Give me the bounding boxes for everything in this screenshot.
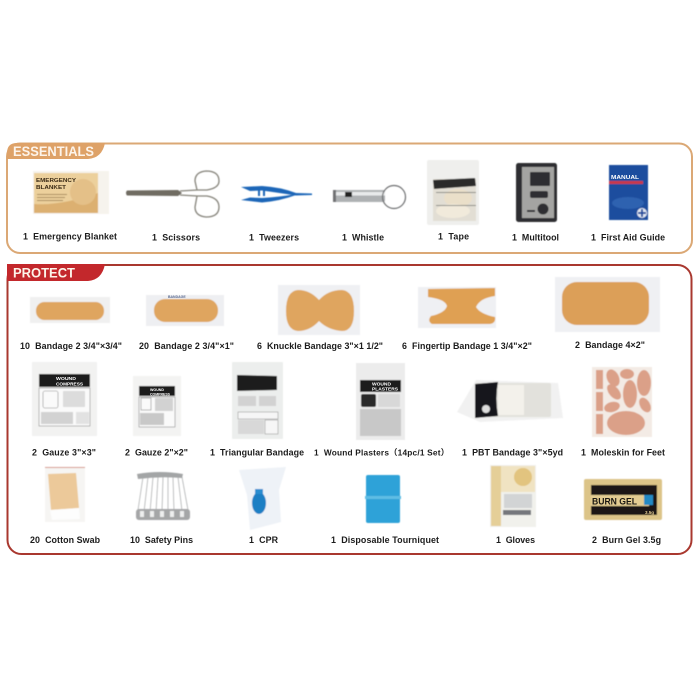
item: gauze 2x2: 2 Gauze 2"×2" [125, 448, 188, 458]
item: emergency blanket: EMERGENCY [36, 178, 76, 184]
item: wound plasters: 1 Wound Plasters（14pc/1 Set） [314, 448, 449, 458]
item: tape: 1 Tape [438, 232, 469, 242]
heading: protect: PROTECT [13, 266, 76, 280]
heading: essentials: ESSENTIALS [13, 144, 94, 159]
item: cpr [239, 467, 286, 545]
item: multitool: 1 Multitool [512, 232, 559, 242]
item: knuckle bandage [257, 285, 383, 351]
item: wound plasters [314, 363, 449, 458]
item: gloves [490, 465, 536, 545]
item: gloves: 1 Gloves [496, 535, 535, 545]
item: cotton swab [30, 467, 101, 545]
item: first aid guide: MANUAL [611, 175, 640, 181]
item: emergency blanket: 1 Emergency Blanket [23, 232, 117, 242]
item: cpr: 1 CPR [249, 535, 279, 545]
item: emergency blanket [23, 171, 117, 242]
item: gauze 2x2: WOUND [150, 388, 164, 392]
item: bandage 20 [139, 295, 234, 351]
item: gauze 2x2 [125, 376, 188, 458]
item: burn gel: 3.5g [645, 510, 654, 515]
item: disposable tourniquet [331, 475, 439, 545]
item: pbt bandage: 1 PBT Bandage 3"×5yd [462, 448, 563, 458]
item: bandage 4x2: 2 Bandage 4×2" [575, 340, 645, 350]
item: gauze 3x3: 2 Gauze 3"×3" [32, 448, 96, 458]
item: tweezers [241, 186, 312, 242]
item: moleskin: 1 Moleskin for Feet [581, 448, 665, 458]
item: pbt bandage [457, 380, 563, 458]
item: tape [427, 160, 479, 242]
item: first aid guide [591, 165, 665, 242]
item: tweezers: 1 Tweezers [249, 232, 299, 242]
item: burn gel: BURN GEL [592, 496, 637, 506]
item: emergency blanket: BLANKET [36, 185, 67, 191]
item: triangular bandage: 1 Triangular Bandage [210, 448, 304, 458]
item: cotton swab: 20 Cotton Swab [30, 535, 101, 545]
item: bandage 20: BANDAGE [168, 295, 186, 299]
item: gauze 3x3 [32, 362, 97, 458]
item: gauze 3x3: COMPRESS [56, 382, 83, 386]
panel: essentials [7, 143, 692, 253]
item: fingertip bandage [402, 287, 532, 351]
item: burn gel [584, 479, 662, 545]
item: wound plasters: WOUND [372, 382, 391, 386]
item: gauze 3x3: WOUND [56, 376, 77, 381]
item: whistle [333, 186, 406, 242]
heading: protect [7, 264, 105, 281]
item: disposable tourniquet: 1 Disposable Tourniquet [331, 535, 439, 545]
item: bandage 10 [20, 297, 122, 351]
item: whistle: 1 Whistle [342, 232, 384, 242]
item: scissors [126, 171, 219, 242]
item: moleskin [581, 367, 665, 458]
item: safety pins: 10 Safety Pins [130, 535, 193, 545]
item: triangular bandage [210, 362, 304, 458]
item: multitool [512, 163, 559, 242]
item: fingertip bandage: 6 Fingertip Bandage 1 3/4"×2" [402, 341, 532, 351]
item: bandage 10: 10 Bandage 2 3/4"×3/4" [20, 341, 122, 351]
item: wound plasters: PLASTERS [372, 386, 398, 392]
item: knuckle bandage: 6 Knuckle Bandage 3"×1 1/2" [257, 341, 383, 351]
item: gauze 2x2: COMPRESS [150, 392, 171, 396]
item: bandage 4x2 [555, 277, 660, 350]
item: first aid guide: 1 First Aid Guide [591, 232, 665, 242]
item: bandage 20: 20 Bandage 2 3/4"×1" [139, 341, 234, 351]
panel: protect [7, 264, 692, 554]
item: safety pins [130, 472, 193, 545]
item: scissors: 1 Scissors [152, 232, 200, 242]
item: burn gel: 2 Burn Gel 3.5g [592, 535, 661, 545]
